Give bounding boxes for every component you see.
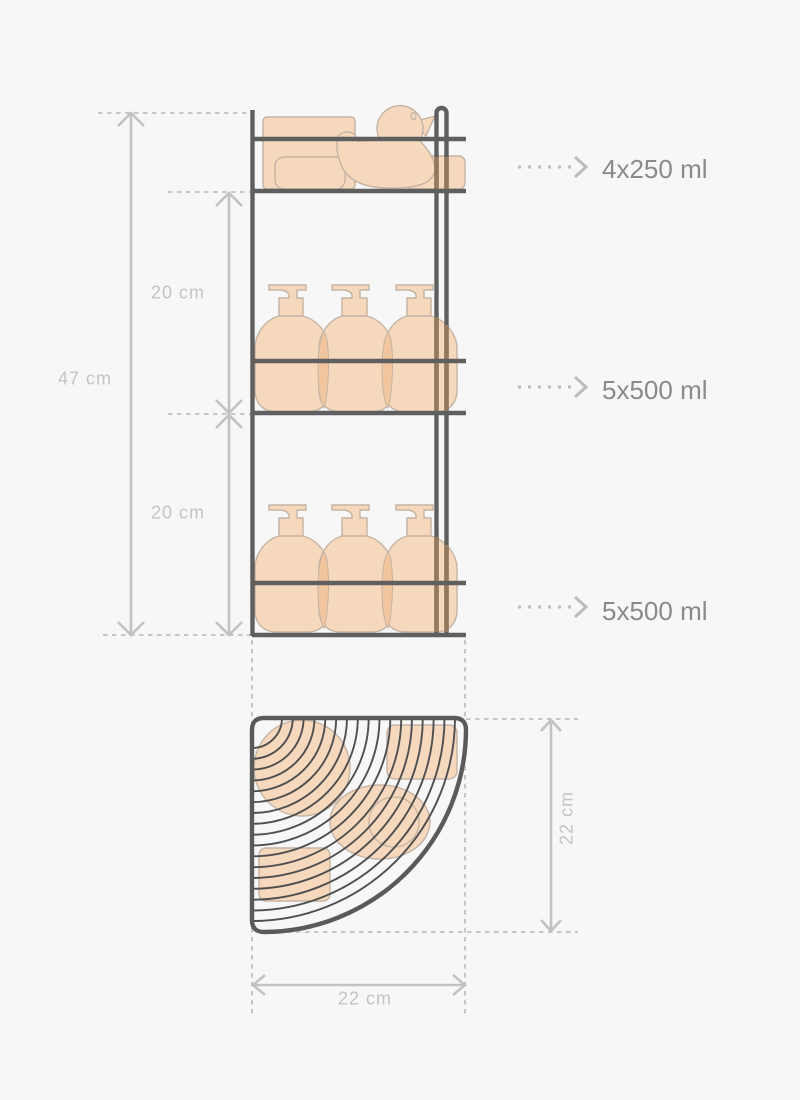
top view items xyxy=(254,720,457,901)
soap: bottom left xyxy=(259,848,330,901)
dimension: upper 20 cm xyxy=(151,193,242,413)
soap bar: right xyxy=(405,156,465,189)
dimension: 22 cm depth: 22 cm xyxy=(556,791,576,845)
dimension: upper 20 cm: 20 cm xyxy=(151,282,205,302)
duck: top view xyxy=(330,785,430,859)
soap: top right xyxy=(387,725,457,779)
sponge: round xyxy=(254,720,350,816)
infographic: shower caddy dimensions xyxy=(58,104,706,1014)
callout: top shelf capacity: 4x250 ml xyxy=(602,154,708,184)
rubber duck xyxy=(337,106,435,188)
dimension: lower 20 cm xyxy=(151,415,242,635)
bottom shelf bottles xyxy=(255,505,457,632)
callout: middle shelf capacity xyxy=(518,375,708,405)
rack front view xyxy=(252,108,466,636)
top shelf items xyxy=(263,106,465,189)
bottle 5 xyxy=(319,505,393,632)
dimension: 22 cm width xyxy=(253,975,465,1008)
callout: middle shelf capacity: 5x500 ml xyxy=(602,375,708,405)
rack top view xyxy=(250,716,468,934)
dimension: 22 cm width: 22 cm xyxy=(338,988,392,1008)
callout: bottom shelf capacity xyxy=(518,596,708,626)
callout: top shelf capacity xyxy=(518,154,708,184)
soap bar: front left xyxy=(275,157,345,189)
dimension: 22 cm depth xyxy=(541,720,576,931)
bottle 6 xyxy=(384,505,457,632)
dimension: lower 20 cm: 20 cm xyxy=(151,502,205,522)
bottle 4 xyxy=(255,505,329,632)
callout: bottom shelf capacity: 5x500 ml xyxy=(602,596,708,626)
soap bar: back left xyxy=(263,117,355,189)
bottle 3 xyxy=(384,285,457,412)
dimension: 47 cm height: 47 cm xyxy=(58,368,112,388)
middle shelf bottles xyxy=(255,285,457,412)
bottle 2 xyxy=(319,285,393,412)
bottle 1 xyxy=(255,285,329,412)
dimension: 47 cm height xyxy=(58,113,144,635)
